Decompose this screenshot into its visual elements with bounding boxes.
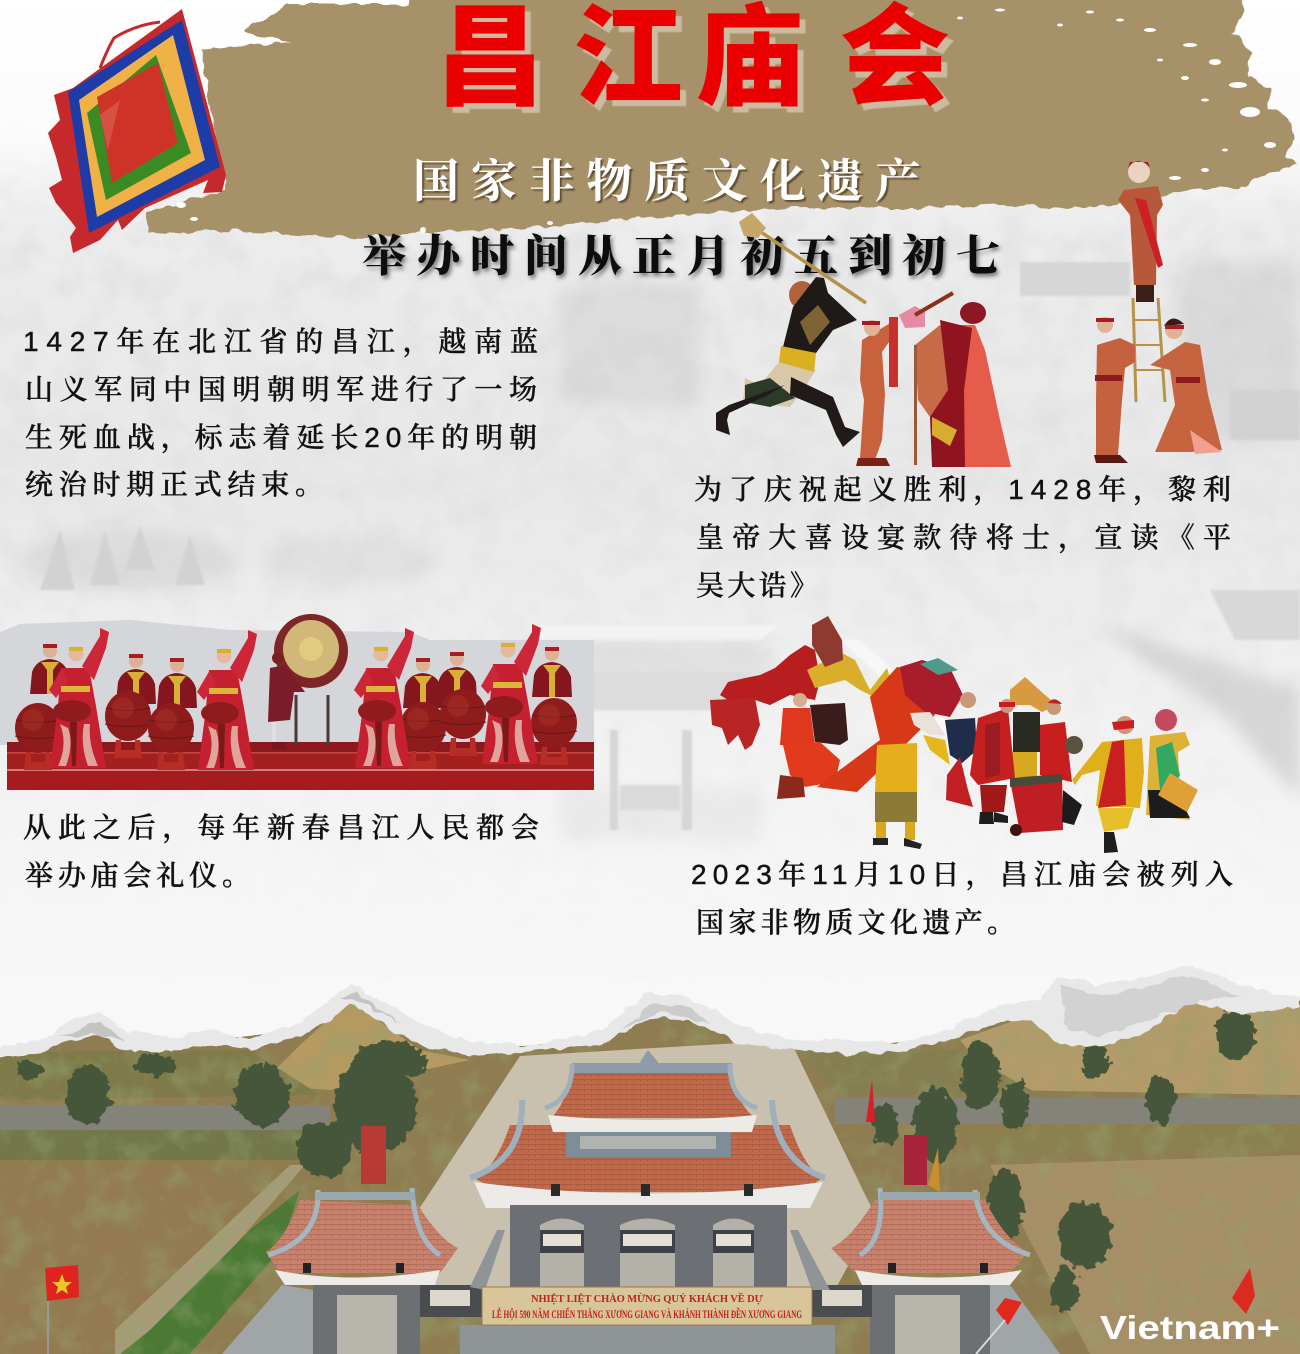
photo: temple gate with grounds xyxy=(0,980,1300,1354)
text block: 1428 celebration xyxy=(694,474,1231,601)
masked clown figure xyxy=(1146,709,1198,820)
welcome banner: NHIỆT LIỆT CHÀO MỪNG QUÝ KHÁCH VỀ DỰ xyxy=(531,1292,764,1305)
gong xyxy=(274,614,348,745)
jumping warrior with hammer xyxy=(716,213,866,447)
stone gate with three arches xyxy=(510,1205,787,1289)
drummer in red xyxy=(970,699,1015,824)
icon: tattered five-colour festival flag xyxy=(48,9,226,253)
two men holding the ladder xyxy=(1094,317,1222,463)
main roof tier xyxy=(470,1100,825,1208)
general in red cape xyxy=(899,293,1011,467)
logo: Vietnam+: Vietnam+ xyxy=(1100,1309,1280,1346)
brown brush stroke banner xyxy=(146,0,1298,238)
subtitle: 国家非物质文化遗产 xyxy=(413,145,921,211)
icon: Vietnamese flag left xyxy=(45,1265,79,1354)
stone plaza xyxy=(415,1040,875,1290)
upper roof tier xyxy=(545,1050,757,1157)
text block: 2023 listing: 国家非物质文化遗产。 xyxy=(696,907,1015,938)
welcome banner xyxy=(482,1287,812,1325)
text block: annual festival: 从此之后，每年新春昌江人民都会 xyxy=(23,812,539,843)
parade attendant in red and yellow xyxy=(777,693,840,799)
date heading: 举办时间从正月初五到初七 xyxy=(362,220,1000,284)
female drummers xyxy=(49,624,541,770)
icon: red flags right xyxy=(976,1268,1255,1354)
text block: 1428 celebration: 吴大诰》 xyxy=(696,570,818,601)
red banners xyxy=(361,1080,940,1192)
text block: 2023 listing: 2023年11月10日，昌江庙会被列入 xyxy=(691,859,1233,890)
text block: 1427 battle: 山义军同中国明朝明军进行了一场 xyxy=(25,374,537,405)
stone retaining walls xyxy=(0,1098,1300,1130)
balustrade and plinth xyxy=(420,1230,872,1354)
left gate pavilion xyxy=(222,1188,458,1354)
man in blue jacket xyxy=(945,692,977,807)
parade drum on cart xyxy=(1010,774,1082,836)
illustration: drum troupe on red stage xyxy=(0,614,594,790)
text block: 1428 celebration: 为了庆祝起义胜利，1428年，黎利 xyxy=(694,474,1231,505)
masked man with lion head xyxy=(1008,677,1057,777)
right gate pavilion xyxy=(831,1188,1060,1354)
welcome banner: LỄ HỘI 590 NĂM CHIẾN THẮNG XƯƠNG GIANG VÀ KHÁNH THÀNH ĐỀN XƯƠNG GIANG xyxy=(492,1306,802,1321)
text block: 1428 celebration: 皇帝大喜设宴款待将士，宣读《平 xyxy=(696,522,1231,553)
trees xyxy=(16,1009,1255,1312)
woman in yellow with drumstick xyxy=(1072,716,1144,853)
ground and hills xyxy=(0,980,1300,1354)
text block: 1427 battle: 生死血战，标志着延长20年的明朝 xyxy=(25,422,537,453)
text block: 2023 listing xyxy=(691,859,1233,938)
attendant in orange with red ribbon xyxy=(856,317,898,466)
text block: annual festival: 举办庙会礼仪。 xyxy=(25,860,250,891)
dragon xyxy=(710,616,890,750)
gong player xyxy=(268,652,305,750)
acrobat on bamboo ladder xyxy=(1118,161,1165,402)
woman with cymbals xyxy=(1040,699,1083,782)
illustration: warrior and performers xyxy=(716,161,1222,467)
text block: 1427 battle: 1427年在北江省的昌江，越南蓝 xyxy=(23,326,538,357)
lion dancer with cape xyxy=(817,658,963,849)
illustration: dragon and lion dance parade xyxy=(710,616,1198,853)
torn paper edge along the skyline xyxy=(0,965,1300,1058)
stage steps xyxy=(7,742,594,790)
text block: 1427 battle xyxy=(23,326,538,500)
text block: 1427 battle: 统治时期正式结束。 xyxy=(25,469,323,500)
male drummers xyxy=(15,644,577,770)
text block: annual festival xyxy=(23,812,539,891)
man behind the dragon xyxy=(810,703,848,745)
